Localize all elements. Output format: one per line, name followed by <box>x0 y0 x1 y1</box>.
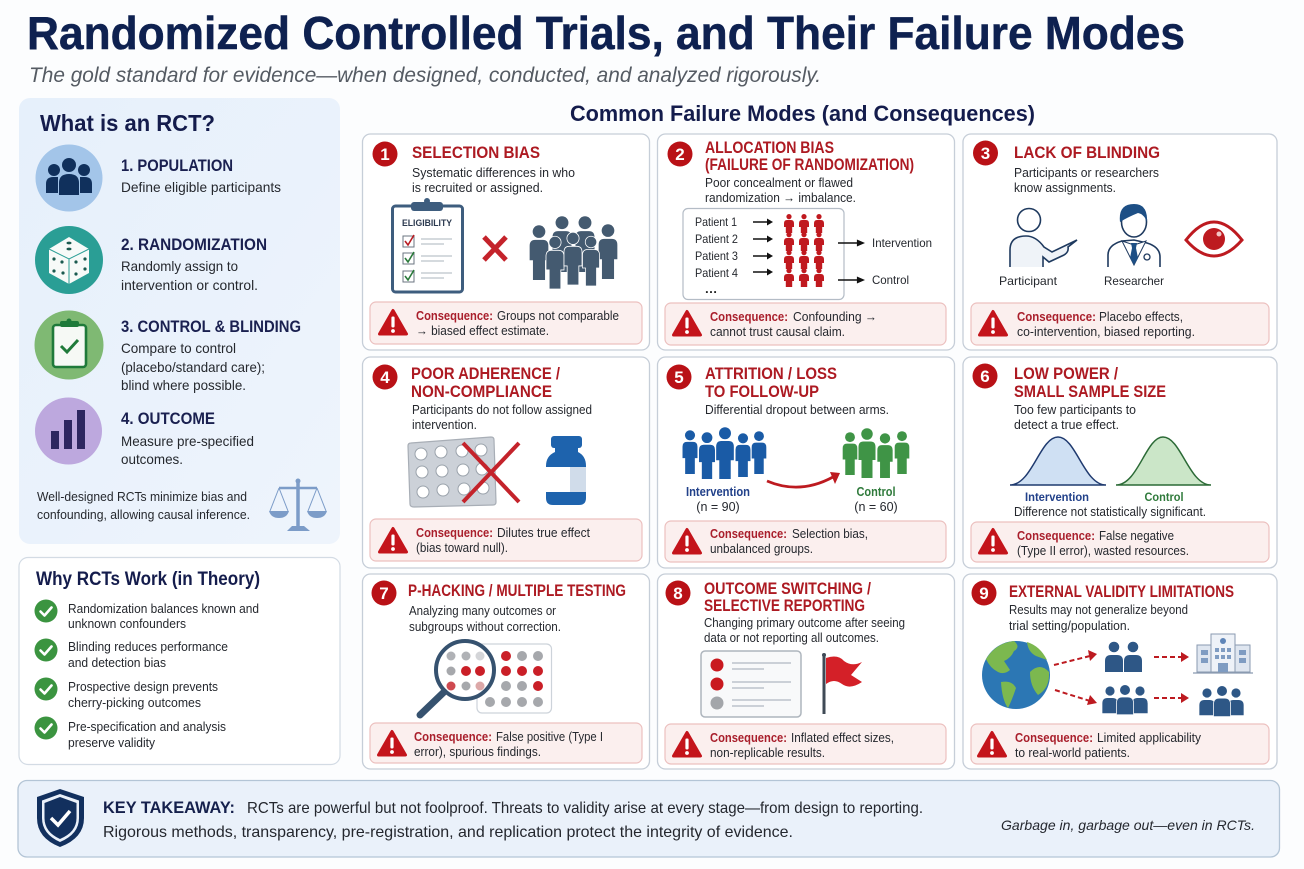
takeaway text: RCTs are powerful but not foolproof. Threats to validity arise at every stage—from design to reporting. <box>247 800 923 817</box>
diagram: patient allocation <box>683 208 932 300</box>
description <box>1014 166 1159 195</box>
description: data or not reporting all outcomes. <box>704 631 879 645</box>
note <box>37 490 250 522</box>
consequence: cannot trust causal claim. <box>710 325 845 339</box>
note: Well-designed RCTs minimize bias and <box>37 490 247 504</box>
consequence <box>370 723 642 763</box>
description <box>705 176 856 205</box>
panel: key takeaway <box>18 780 1280 857</box>
heading <box>705 139 914 174</box>
number badge <box>666 364 692 390</box>
title: Randomized Controlled Trials, and Their Failure Modes <box>27 7 1185 59</box>
number badge <box>372 580 396 606</box>
step 3 text: (placebo/standard care); <box>121 359 265 375</box>
consequence: (Type II error), wasted resources. <box>1017 544 1189 558</box>
number badge: 4 <box>380 368 390 387</box>
icon: red cross <box>484 237 506 260</box>
description: Results may not generalize beyond <box>1009 603 1188 617</box>
description <box>1014 403 1136 432</box>
takeaway text: KEY TAKEAWAY: <box>103 798 235 817</box>
icon: red cross <box>463 443 519 502</box>
card 3: lack of blinding <box>963 134 1277 350</box>
consequence: non-replicable results. <box>710 746 825 760</box>
description: Differential dropout between arms. <box>705 403 889 417</box>
number badge <box>666 580 690 606</box>
reason 4: preserve validity <box>68 736 156 750</box>
consequence: Inflated effect sizes, <box>791 731 894 745</box>
icon: researcher <box>1104 204 1164 288</box>
consequence: Consequence: <box>1017 310 1096 324</box>
icon: population <box>36 144 102 212</box>
description: Systematic differences in who <box>412 166 575 180</box>
number badge: 6 <box>980 367 990 386</box>
icon: eligibility clipboard: ELIGIBILITY <box>402 218 453 229</box>
description: subgroups without correction. <box>409 620 561 634</box>
consequence: to real-world patients. <box>1015 746 1130 760</box>
number badge <box>973 140 998 166</box>
diagram: patient allocation: Patient 1 <box>695 215 737 229</box>
arrows: dashed <box>1054 656 1183 701</box>
consequence <box>971 303 1269 345</box>
heading <box>1014 365 1166 401</box>
chart: control bell curve <box>1116 437 1211 504</box>
labels: (n = 60) <box>854 500 898 514</box>
consequence: Consequence: <box>1015 731 1093 745</box>
icon: dice <box>35 226 103 294</box>
consequence <box>370 519 642 561</box>
number badge: 8 <box>673 584 683 603</box>
heading: LOW POWER / <box>1014 365 1118 383</box>
chart: intervention bell curve <box>1010 437 1106 504</box>
diagram: patient allocation: Patient 3 <box>695 249 738 263</box>
step 3 text: blind where possible. <box>121 377 246 393</box>
labels: Control <box>856 485 896 499</box>
number badge: 9 <box>979 584 989 603</box>
heading: SELECTIVE REPORTING <box>704 597 865 615</box>
description: Participants do not follow assigned <box>412 403 592 417</box>
labels: Intervention <box>686 485 750 499</box>
icon: blister pack <box>408 437 496 507</box>
icon: globe <box>982 641 1050 709</box>
description: trial setting/population. <box>1009 619 1130 633</box>
consequence <box>971 522 1269 562</box>
step 3 text: 3. CONTROL & BLINDING <box>121 318 301 336</box>
consequence: Consequence: <box>710 731 787 745</box>
heading <box>411 365 560 401</box>
number badge: 1 <box>380 145 390 164</box>
chart: control bell curve: Control <box>1144 490 1184 504</box>
takeaway text: Rigorous methods, transparency, pre-registration, and replication protect the integrity of evidence. <box>103 824 793 841</box>
number badge: 3 <box>981 144 990 163</box>
card 6: low power <box>963 357 1277 568</box>
finding: Difference not statistically significant. <box>1014 505 1206 519</box>
heading: NON-COMPLIANCE <box>411 383 552 401</box>
card 8: outcome switching <box>658 574 954 769</box>
consequence: (bias toward null). <box>416 541 508 555</box>
consequence: Consequence: <box>416 309 493 323</box>
heading: SELECTION BIAS <box>412 144 540 162</box>
icon: eligibility clipboard <box>392 198 462 292</box>
description: randomization → imbalance. <box>705 191 856 205</box>
consequence <box>971 724 1269 764</box>
number badge <box>972 580 996 606</box>
section heading: Common Failure Modes (and Consequences) <box>570 101 1035 126</box>
icon: researcher: Researcher <box>1104 274 1164 288</box>
number badge <box>668 142 692 166</box>
heading: P-HACKING / MULTIPLE TESTING <box>408 582 626 600</box>
heading: SMALL SAMPLE SIZE <box>1014 383 1166 401</box>
consequence: Dilutes true effect <box>497 526 590 540</box>
panel: why RCTs work <box>19 558 340 764</box>
consequence: error), spurious findings. <box>414 745 541 759</box>
heading: TO FOLLOW-UP <box>705 383 819 401</box>
reason 2: Blinding reduces performance <box>68 640 228 654</box>
heading <box>705 365 837 401</box>
icon: medicine bottle <box>546 436 586 505</box>
icon: eye <box>1186 222 1242 256</box>
description <box>704 616 905 645</box>
description: Poor concealment or flawed <box>705 176 853 190</box>
card 2: allocation bias <box>658 134 954 350</box>
description: know assignments. <box>1014 181 1116 195</box>
description: Participants or researchers <box>1014 166 1159 180</box>
reason 4: Pre-specification and analysis <box>68 720 226 734</box>
panel: what is an RCT <box>19 98 340 544</box>
icon: participant: Participant <box>999 274 1058 288</box>
step 1 text <box>121 157 281 195</box>
step 1 text: 1. POPULATION <box>121 157 233 175</box>
reason 3: cherry-picking outcomes <box>68 696 201 710</box>
consequence <box>370 302 642 344</box>
consequence: Confounding → <box>793 310 877 324</box>
heading: What is an RCT? <box>40 110 215 136</box>
consequence: False positive (Type I <box>496 730 603 744</box>
reason 1: unknown confounders <box>68 617 186 631</box>
consequence: Selection bias, <box>792 527 868 541</box>
consequence <box>665 303 946 345</box>
number badge <box>372 364 398 390</box>
step 4 text <box>121 410 254 467</box>
diagram: patient allocation: Patient 2 <box>695 232 738 246</box>
chart: intervention bell curve: Intervention <box>1025 490 1089 504</box>
consequence: Limited applicability <box>1097 731 1202 745</box>
consequence: Consequence: <box>416 526 493 540</box>
description <box>1009 603 1188 633</box>
heading: ALLOCATION BIAS <box>705 139 834 157</box>
card 4: poor adherence <box>362 357 650 568</box>
step 2 text: Randomly assign to <box>121 258 238 274</box>
heading: Why RCTs Work (in Theory) <box>36 569 260 590</box>
consequence: Placebo effects, <box>1099 310 1183 324</box>
number badge <box>972 364 998 388</box>
description <box>412 403 592 432</box>
heading: POOR ADHERENCE / <box>411 365 560 383</box>
icon: participant <box>999 208 1077 288</box>
consequence: Consequence: <box>1017 529 1095 543</box>
consequence: False negative <box>1099 529 1174 543</box>
card 1: selection bias <box>362 134 650 350</box>
icon: bar chart <box>35 398 102 464</box>
arrow <box>767 472 840 487</box>
subtitle: The gold standard for evidence—when designed, conducted, and analyzed rigorously. <box>29 64 821 87</box>
arrowheads <box>1087 650 1189 705</box>
card 7: p-hacking <box>362 574 650 769</box>
consequence <box>665 724 946 764</box>
step 2 text <box>121 236 267 293</box>
diagram: patient allocation: Patient 4 <box>695 266 738 280</box>
reason 2 <box>34 638 228 670</box>
diagram: patient allocation: Intervention <box>872 236 932 250</box>
consequence: unbalanced groups. <box>710 542 813 556</box>
icon: intervention group <box>683 427 766 479</box>
description <box>409 604 561 634</box>
reason 2: and detection bias <box>68 656 166 670</box>
step 4 text: 4. OUTCOME <box>121 410 215 428</box>
number badge: 2 <box>675 145 685 164</box>
icon: scales <box>269 478 327 531</box>
takeaway text <box>103 798 923 841</box>
consequence: Consequence: <box>710 527 787 541</box>
description: detect a true effect. <box>1014 418 1119 432</box>
step 4 text: Measure pre-specified <box>121 433 254 449</box>
icon: shield <box>37 789 84 847</box>
description: Changing primary outcome after seeing <box>704 616 905 630</box>
heading: LACK OF BLINDING <box>1014 144 1160 162</box>
heading <box>704 580 871 615</box>
step 3 text: Compare to control <box>121 340 236 356</box>
consequence: Consequence: <box>710 310 788 324</box>
reason 4 <box>34 716 226 750</box>
description: intervention. <box>412 418 477 432</box>
consequence: Groups not comparable <box>497 309 619 323</box>
step 4 text: outcomes. <box>121 451 183 467</box>
reason 3 <box>34 678 218 710</box>
step 3 text <box>121 318 301 393</box>
chart: dots with magnifier <box>420 641 552 715</box>
closing quote: Garbage in, garbage out—even in RCTs. <box>1001 817 1255 833</box>
number badge: 7 <box>379 584 389 603</box>
consequence: → biased effect estimate. <box>416 324 549 338</box>
reason 1 <box>34 600 259 631</box>
description <box>412 166 575 195</box>
consequence <box>665 521 946 562</box>
number badge <box>372 142 398 166</box>
reason 3: Prospective design prevents <box>68 680 218 694</box>
heading: ATTRITION / LOSS <box>705 365 837 383</box>
step 2 text: intervention or control. <box>121 277 258 293</box>
labels: (n = 90) <box>696 500 740 514</box>
consequence: Consequence: <box>414 730 492 744</box>
description: is recruited or assigned. <box>412 181 543 195</box>
icon: clipboard <box>34 310 104 380</box>
step 1 text: Define eligible participants <box>121 179 281 195</box>
reason 1: Randomization balances known and <box>68 602 259 616</box>
step 2 text: 2. RANDOMIZATION <box>121 236 267 254</box>
diagram: patient allocation: … <box>704 281 718 296</box>
description: Too few participants to <box>1014 403 1136 417</box>
consequence: co-intervention, biased reporting. <box>1017 325 1195 339</box>
icon: crowd <box>530 216 617 289</box>
description: Analyzing many outcomes or <box>409 604 556 618</box>
note: confounding, allowing causal inference. <box>37 508 250 522</box>
heading: EXTERNAL VALIDITY LIMITATIONS <box>1009 583 1234 601</box>
icon: outcome list <box>701 651 801 717</box>
icon: control group <box>843 428 909 478</box>
diagram: patient allocation: Control <box>872 273 909 287</box>
card 9: external validity <box>963 574 1277 769</box>
heading: OUTCOME SWITCHING / <box>704 580 871 598</box>
heading: (FAILURE OF RANDOMIZATION) <box>705 156 914 174</box>
card 5: attrition <box>658 357 954 568</box>
icon: red flag <box>822 653 862 714</box>
labels <box>686 485 898 514</box>
icon: hospital <box>1193 634 1253 673</box>
icon: small groups <box>1102 642 1244 717</box>
number badge: 5 <box>674 368 684 387</box>
